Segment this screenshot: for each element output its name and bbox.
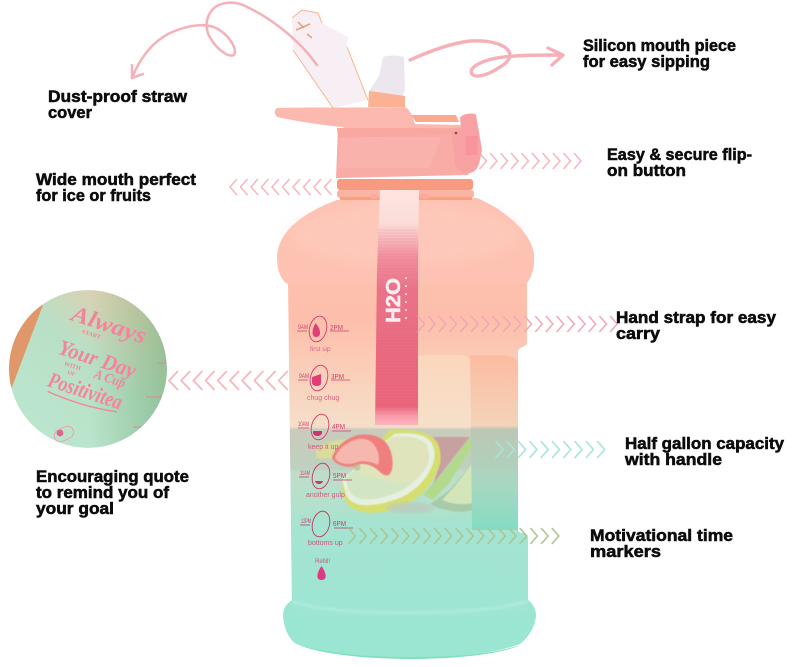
quote lettering: Always (66, 300, 150, 348)
lens green shade (100, 292, 167, 446)
chevrons: encouraging quote (167, 370, 289, 391)
mouthpiece base (368, 91, 405, 107)
label: to remind you of: to remind you of (36, 484, 170, 502)
arrow: silicon mouth piece (410, 41, 563, 76)
label: carry: carry (616, 325, 661, 343)
quote lettering: Positivitea (44, 367, 126, 414)
time marker: keep it up: keep it up (308, 444, 338, 451)
base highlight (292, 601, 528, 613)
lens small drop (57, 430, 63, 436)
lens background (9, 290, 167, 448)
lemon lower flesh (346, 470, 414, 499)
lid flap (275, 107, 462, 128)
strap side loops (371, 194, 428, 199)
time marker: bottoms up (300, 509, 353, 547)
yellow slice behind (316, 439, 350, 460)
label: encouraging quote: Encouraging quote (36, 468, 189, 486)
time marker: first sip: first sip (310, 346, 331, 353)
strawberry flesh (335, 439, 379, 465)
time marker: first sip: 2PM (330, 325, 343, 332)
time marker: bottoms up: 6PM (333, 521, 346, 528)
chevrons: wide mouth (228, 178, 333, 196)
lens small pill (54, 426, 74, 442)
label: your goal: your goal (36, 500, 114, 518)
lemon flesh (346, 437, 429, 499)
quote lettering: START (81, 329, 101, 341)
handle block (470, 355, 518, 530)
base bottom edge (298, 645, 520, 659)
bottle (275, 10, 536, 659)
time marker: chug chug: 9AM (299, 374, 309, 380)
strap logo: H2O (383, 278, 405, 323)
label: for ice or fruits: for ice or fruits (36, 187, 151, 205)
time marker: another gulp (299, 461, 352, 499)
label: dust-proof straw cover: Dust-proof straw (48, 88, 187, 106)
time marker: another gulp: 11AM (300, 471, 310, 477)
label: on button: on button (607, 162, 686, 180)
chevrons: flip-on button (478, 152, 583, 170)
lid panel (338, 137, 441, 168)
grey shadow under fruit (386, 502, 434, 514)
time marker: chug chug: chug chug (307, 395, 339, 402)
lemon white rim (342, 433, 434, 505)
lid back tab (411, 115, 459, 122)
strap (375, 190, 419, 425)
lemon slice (342, 430, 441, 513)
time marker: chug chug: 3PM (331, 374, 344, 381)
green fade over fruit base (366, 512, 378, 513)
label: half gallon capacity: Half gallon capacity (625, 435, 785, 453)
time marker: first sip (297, 314, 349, 353)
bottle base (283, 600, 536, 658)
straw cover orange detail (296, 22, 312, 38)
latch pin (455, 132, 457, 134)
label: wide mouth perfect: Wide mouth perfect (36, 171, 197, 189)
strap ribs (376, 230, 418, 410)
mouthpiece silicone tip (369, 56, 405, 97)
time marker: another gulp: another gulp (306, 492, 345, 499)
time marker: keep it up: 10AM (298, 422, 309, 428)
lens scale marks (133, 363, 166, 427)
handle window (418, 354, 471, 428)
quote lettering: WITH (63, 361, 81, 372)
collar ring (337, 190, 474, 198)
strawberry stem shadow (354, 464, 360, 470)
grey water band (290, 428, 471, 470)
strap logo dots (405, 278, 407, 318)
time marker: bottoms up: 12PM (301, 519, 311, 525)
quote lettering: Your Day (55, 334, 139, 383)
time marker: keep it up (298, 412, 351, 451)
label: with handle: with handle (624, 451, 722, 469)
bottle body (288, 280, 528, 618)
flip latch (452, 114, 482, 173)
refill marker: Refill! (315, 559, 330, 565)
dome highlight (290, 205, 520, 265)
label: markers: markers (590, 543, 661, 561)
lens orange edge (9, 304, 43, 388)
lid body (336, 128, 475, 178)
label: motivational time: Motivational time (590, 527, 733, 545)
chevrons: time markers (347, 527, 562, 545)
lime slice (442, 462, 473, 504)
time marker: bottoms up: bottoms up (308, 540, 343, 547)
refill marker (315, 559, 330, 580)
time marker: another gulp: 5PM (333, 473, 346, 480)
quote lettering (46, 308, 146, 412)
chevrons: hand strap (416, 315, 619, 333)
straw cover outline (292, 10, 368, 108)
label: cover: cover (48, 104, 93, 122)
dark fruit (433, 437, 470, 485)
time marker: keep it up: 4PM (332, 424, 345, 431)
quote lettering: A Cup (91, 367, 127, 392)
quote lettering: OF (67, 370, 76, 378)
lower orange collar (340, 197, 472, 200)
label: silicon mouth piece: Silicon mouth piece (583, 37, 736, 55)
straw cover (292, 10, 368, 108)
quote close-up circle (0, 290, 167, 448)
arrow: dust-proof straw cover (132, 3, 317, 78)
lid rim (337, 128, 461, 138)
label: easy and secure flip: Easy & secure flip- (607, 146, 752, 164)
time marker: first sip: 9AM (298, 325, 308, 331)
lime slice rim (430, 466, 472, 512)
collar (337, 179, 473, 190)
label: hand strap: Hand strap for easy (616, 309, 777, 327)
chevrons: half gallon (494, 440, 607, 459)
lime wedge (423, 437, 473, 500)
latch detail (465, 136, 478, 155)
dome (277, 198, 534, 284)
fruit inside bottle (290, 428, 472, 514)
strawberry (332, 434, 393, 475)
label: for easy sipping: for easy sipping (583, 53, 710, 71)
time marker: chug chug (298, 363, 350, 402)
